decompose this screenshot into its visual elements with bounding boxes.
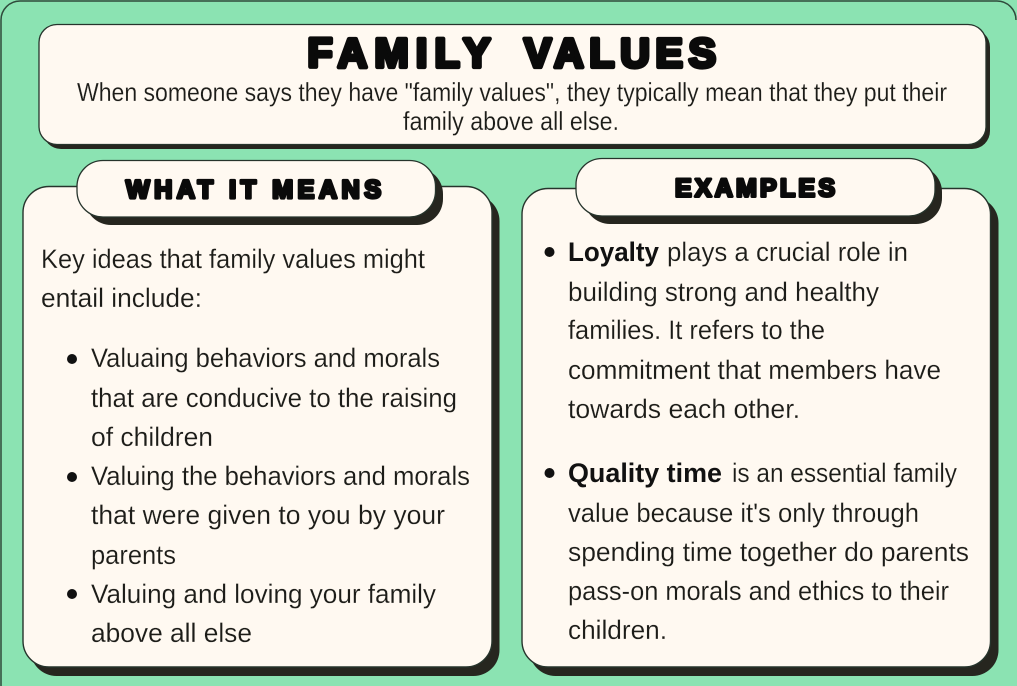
title: VALUES	[524, 30, 716, 76]
bullet: quality time: Quality time	[568, 458, 722, 488]
heading pill: what it means: WHAT IT MEANS	[126, 176, 381, 204]
heading pill: what it means	[77, 160, 443, 225]
bullet: loving your family	[67, 579, 436, 648]
bullet: quality time: value because it's only through	[568, 498, 919, 528]
bullet: raising of children: that are conducive to the raising	[91, 383, 457, 413]
title: FAMILY	[308, 30, 490, 76]
bullet: given by parents: parents	[91, 540, 176, 570]
bullet: quality time	[544, 458, 969, 645]
bullet: loyalty: towards each other.	[568, 394, 800, 424]
title	[308, 30, 716, 76]
bullet: loyalty: Loyalty	[568, 237, 659, 267]
intro text: family above all else.	[403, 106, 619, 136]
panel: what it means	[23, 160, 500, 676]
panel: examples	[522, 158, 998, 676]
bullet: loyalty: families. It refers to the	[568, 315, 825, 345]
bullet: quality time: spending time together do parents	[568, 537, 969, 567]
bullet: given by parents: Valuing the behaviors and morals	[91, 461, 470, 491]
bullet: loyalty: plays a crucial role in	[667, 237, 908, 267]
bullet: loyalty	[544, 237, 941, 424]
bullet: given by parents: that were given to you by your	[91, 500, 445, 530]
bullet: loving your family: above all else	[91, 618, 252, 648]
intro text	[77, 77, 947, 136]
bullet: loyalty: commitment that members have	[568, 355, 941, 385]
bullet: raising of children	[67, 343, 457, 452]
intro paragraph	[41, 244, 425, 313]
bullet: raising of children: Valuaing behaviors and morals	[91, 343, 440, 373]
bullet: loyalty: building strong and healthy	[568, 277, 879, 307]
bullet: quality time: is an essential family	[732, 458, 957, 488]
bullet: quality time: pass-on morals and ethics to their	[568, 576, 949, 606]
bullet: loving your family: Valuing and loving your family	[91, 579, 436, 609]
panel: header	[39, 24, 990, 149]
heading pill: examples	[576, 158, 942, 224]
intro paragraph: entail include:	[41, 283, 202, 313]
intro paragraph: Key ideas that family values might	[41, 244, 425, 274]
bullet: quality time: children.	[568, 615, 667, 645]
bullet: given by parents	[67, 461, 470, 570]
bullet: raising of children: of children	[91, 422, 213, 452]
heading pill: examples: EXAMPLES	[675, 174, 835, 202]
